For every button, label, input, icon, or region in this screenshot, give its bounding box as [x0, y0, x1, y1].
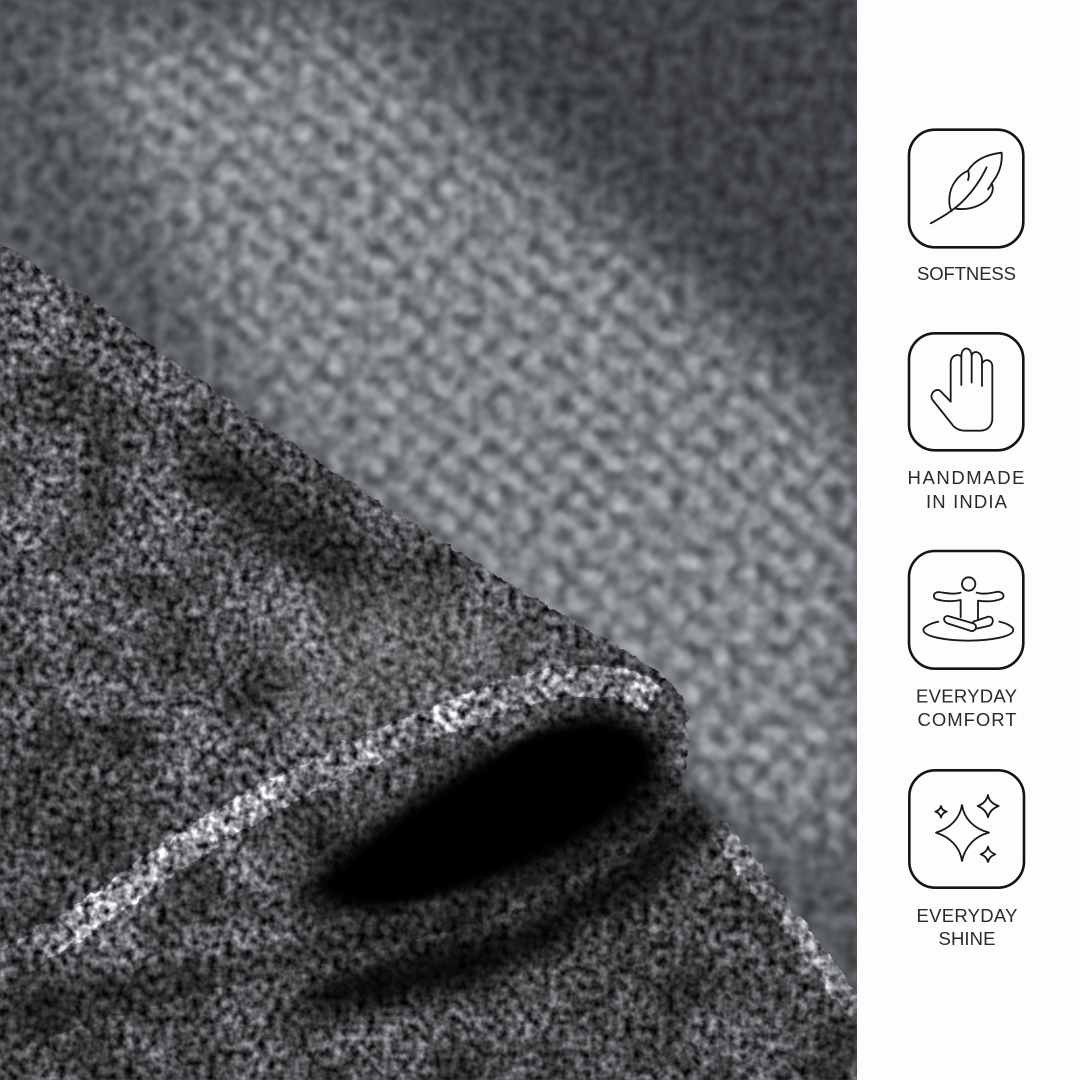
label: everyday shine: EVERYDAY	[916, 905, 1018, 926]
icon: hand	[909, 333, 1023, 450]
light woven diagonal band	[56, 2, 857, 874]
folded rug layer	[0, 246, 690, 1052]
label: handmade in india	[908, 467, 1024, 512]
label: handmade in india: HANDMADE	[908, 467, 1024, 488]
lower rug layer	[0, 788, 857, 1080]
white feature panel	[857, 0, 1080, 1080]
feature: handmade in india	[908, 333, 1024, 512]
feature: everyday shine	[909, 770, 1024, 949]
feature: everyday comfort	[909, 551, 1023, 730]
shadow beneath the fold	[300, 810, 700, 1000]
fold lip highlight	[0, 666, 664, 982]
bright fold patch	[270, 590, 560, 740]
dark upper right rug area	[380, 0, 900, 430]
icon: meditating person	[909, 551, 1023, 669]
icon: sparkles	[909, 770, 1024, 888]
feature: softness	[909, 130, 1023, 284]
label: everyday comfort: COMFORT	[918, 709, 1016, 730]
label: everyday shine: SHINE	[938, 928, 996, 949]
mottled background texture	[0, 0, 858, 1080]
darkened lower lip	[0, 780, 680, 1040]
dark rim around pocket	[290, 712, 672, 925]
dark pocket under the fold	[318, 723, 651, 906]
label: handmade in india: IN INDIA	[926, 491, 1008, 512]
light seam on lower layer	[708, 820, 857, 1018]
label: softness: SOFTNESS	[917, 263, 1016, 284]
label: everyday comfort	[916, 686, 1017, 730]
darker lower left of fold	[0, 760, 200, 950]
label: everyday shine	[916, 905, 1018, 949]
icon: feather	[909, 130, 1023, 247]
label: everyday comfort: EVERYDAY	[916, 686, 1017, 706]
dark area along fold crease	[170, 420, 480, 640]
